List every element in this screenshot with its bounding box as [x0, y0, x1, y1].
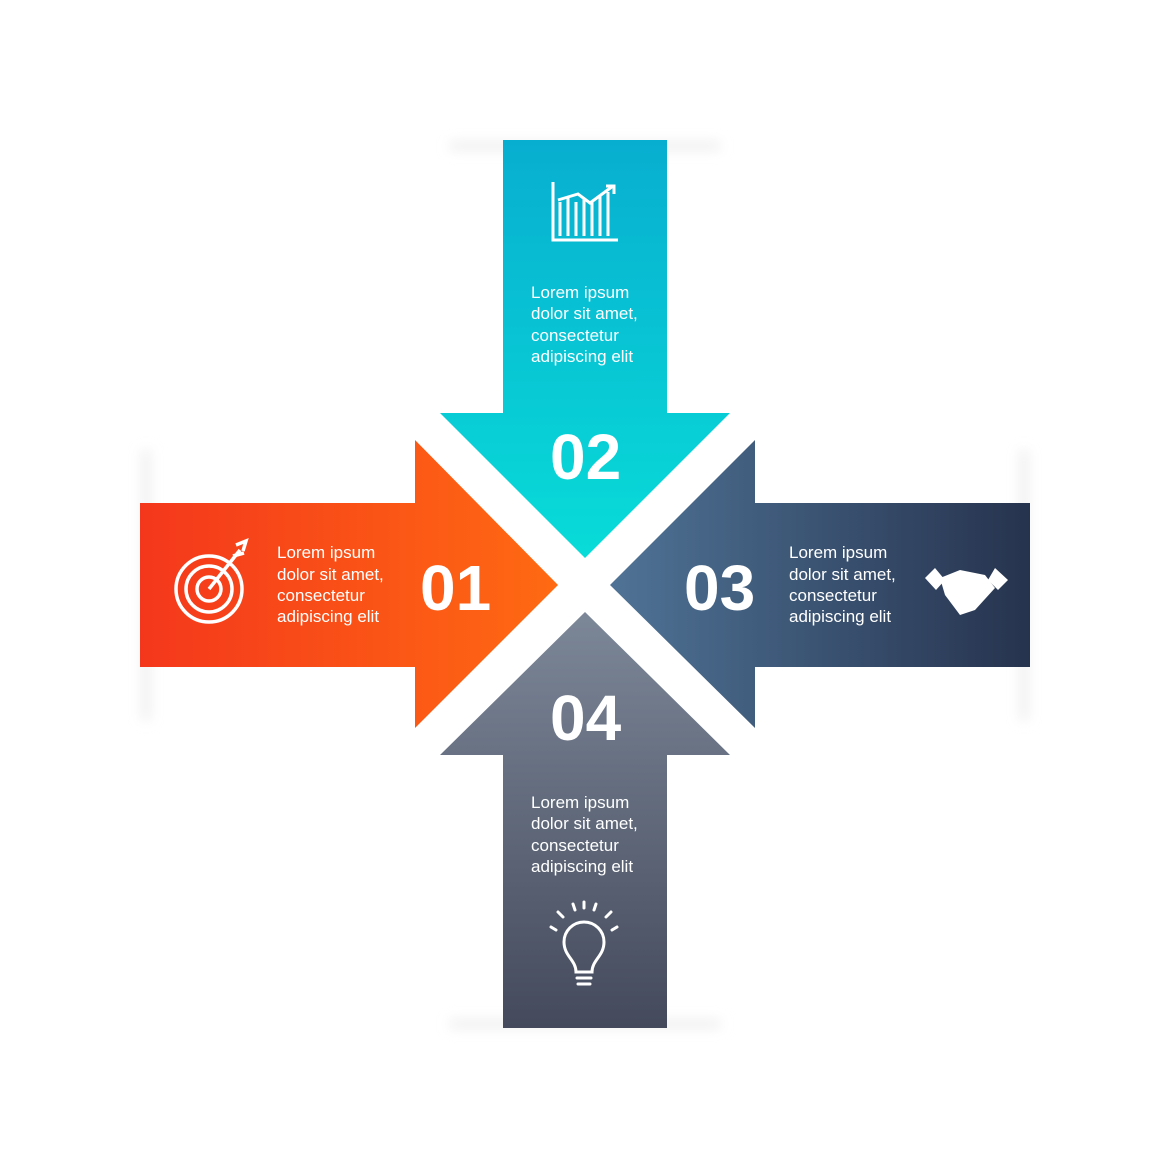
number 04: 04 [550, 682, 622, 754]
icon: bar chart [553, 182, 618, 240]
text block 03: Lorem ipsum [789, 543, 887, 562]
icon: target [176, 541, 246, 622]
number 02: 02 [550, 421, 621, 493]
arrow 03 right: adipiscing elit [789, 607, 891, 626]
text block 02: Lorem ipsum [531, 283, 629, 302]
arrow 04 bottom: adipiscing elit [531, 857, 633, 876]
arrow 03 right [610, 440, 1030, 728]
icon: handshake [925, 568, 1008, 615]
number 03: 03 [684, 552, 755, 624]
arrow 01 left: consectetur [277, 586, 365, 605]
arrow 02 top [440, 140, 730, 558]
text block 04: Lorem ipsum [531, 793, 629, 812]
arrow 02 top: adipiscing elit [531, 347, 633, 366]
arrow 04 bottom [440, 612, 730, 1028]
icon: light bulb [551, 902, 617, 984]
arrow 04 bottom: consectetur [531, 836, 619, 855]
arrow 02 top: dolor sit amet, [531, 304, 638, 323]
arrow 02 top: consectetur [531, 326, 619, 345]
arrow 03 right: consectetur [789, 586, 877, 605]
text block 01: Lorem ipsum [277, 543, 375, 562]
shadows [142, 142, 1028, 1028]
arrow 03 right: dolor sit amet, [789, 565, 896, 584]
arrow 01 left [140, 440, 558, 728]
arrow 04 bottom: dolor sit amet, [531, 814, 638, 833]
arrow 01 left: adipiscing elit [277, 607, 379, 626]
arrow 01 left: dolor sit amet, [277, 565, 384, 584]
number 01: 01 [420, 552, 491, 624]
